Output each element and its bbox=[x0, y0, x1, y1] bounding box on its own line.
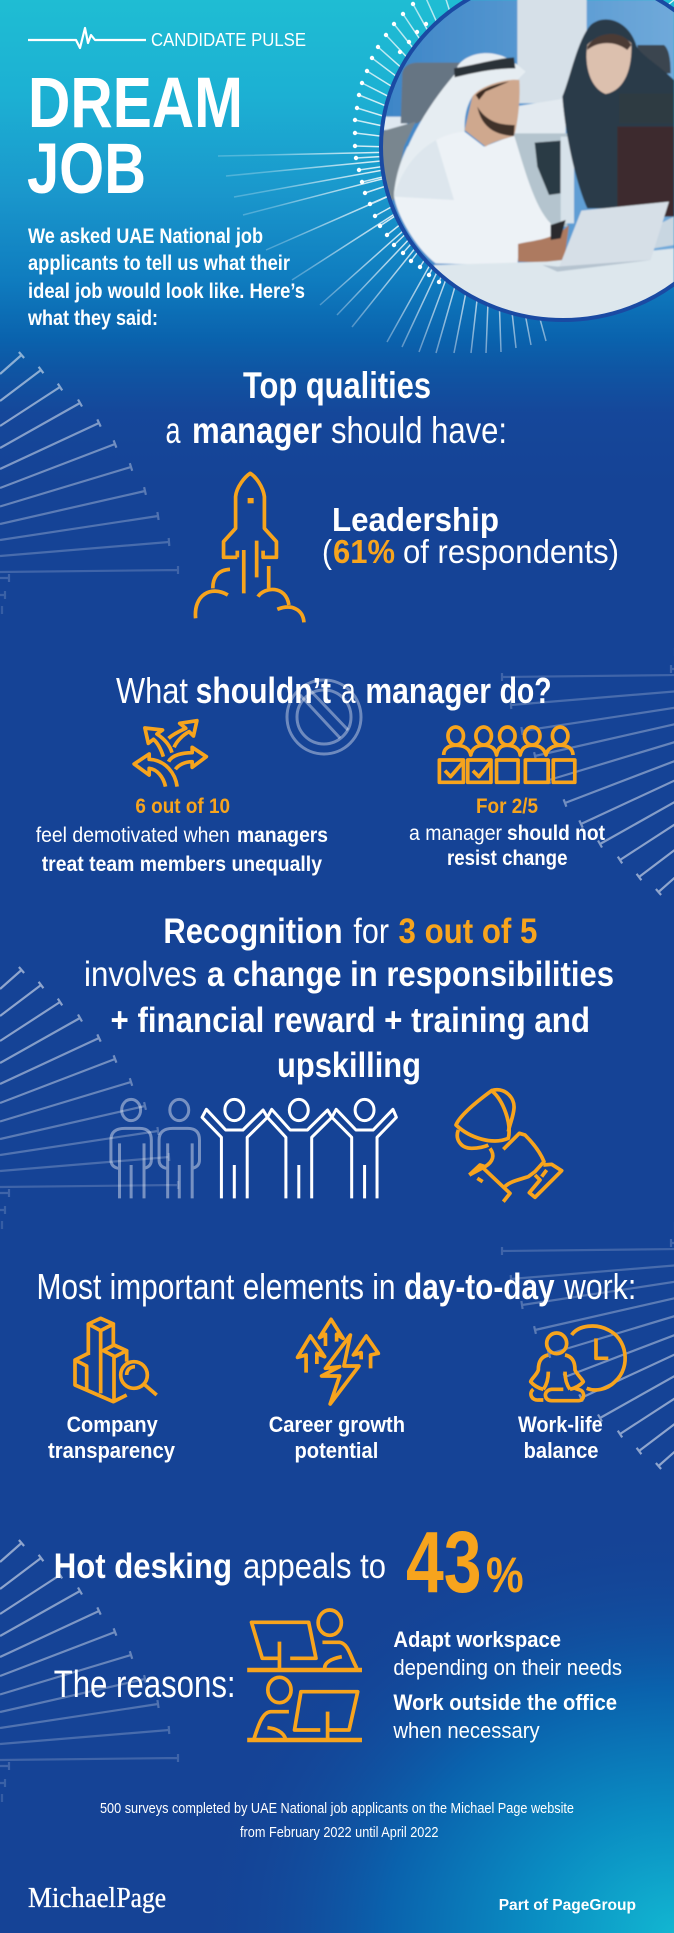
label: Work-life bbox=[518, 1412, 603, 1437]
stat: leadership 61% bbox=[322, 502, 619, 571]
stat: leadership 61%: Leadership bbox=[332, 502, 499, 539]
stat: leadership 61%: 61% bbox=[333, 534, 395, 571]
intro text: applicants to tell us what their bbox=[28, 252, 290, 275]
heading: top qualities bbox=[166, 365, 507, 451]
item: company transparency bbox=[48, 1318, 175, 1463]
heading: what shouldn't a manager do: do? bbox=[500, 670, 552, 711]
stat: 6 out of 10: 6 out of 10 bbox=[135, 794, 230, 818]
label: balance bbox=[524, 1438, 598, 1463]
heading: hot desking 43% bbox=[54, 1514, 524, 1611]
photo: man and woman working at a laptop bbox=[374, 0, 674, 330]
logo: michael page: Page bbox=[116, 1883, 166, 1914]
footnote: 500 surveys completed by UAE National job applicants on the Michael Page website bbox=[100, 1800, 574, 1817]
label bbox=[48, 1412, 175, 1463]
decorative rays: left and right bursts bbox=[0, 352, 674, 1802]
faded people bbox=[111, 1099, 199, 1198]
footnote bbox=[100, 1800, 574, 1841]
heading: most important elements: work: bbox=[563, 1266, 636, 1307]
logo: michael page bbox=[28, 1883, 166, 1914]
title: JOB bbox=[27, 130, 146, 209]
heading: hot desking 43%: 43 bbox=[406, 1514, 482, 1611]
heading: top qualities: a bbox=[166, 410, 181, 451]
heading: what shouldn't a manager do: What bbox=[116, 670, 188, 711]
decorative rays around the photo bbox=[218, 0, 674, 353]
intro text: We asked UAE National job bbox=[28, 225, 263, 248]
heading: recognition: upskilling bbox=[277, 1045, 421, 1085]
brand label: candidate pulse: CANDIDATE PULSE bbox=[151, 30, 306, 50]
heading: top qualities: should have: bbox=[331, 410, 507, 451]
heading: what shouldn't a manager do: manager bbox=[365, 670, 491, 711]
heading: recognition: a change in responsibilities bbox=[207, 954, 614, 994]
intro text: ideal job would look like. Here’s bbox=[28, 280, 305, 303]
reasons text bbox=[393, 1627, 622, 1743]
intro text bbox=[27, 225, 305, 330]
section: day-to-day work bbox=[36, 1266, 636, 1463]
stat: 6 out of 10 bbox=[36, 794, 328, 876]
heading: top qualities: manager bbox=[192, 410, 322, 451]
icon: tilted trophy bbox=[456, 1090, 562, 1202]
label: Career growth bbox=[269, 1412, 405, 1437]
heading: hot desking 43%: appeals to bbox=[243, 1547, 386, 1586]
stat: 6 out of 10: managers bbox=[237, 823, 328, 847]
heading: most important elements: day-to-day bbox=[404, 1266, 555, 1307]
heading: what shouldn't a manager do: shouldn’t bbox=[196, 670, 331, 711]
highlighted people bbox=[202, 1099, 396, 1198]
icon: prohibited watermark bbox=[287, 680, 361, 754]
background corner glow bbox=[0, 1350, 674, 1933]
icon: diverging arrows bbox=[134, 721, 206, 787]
title bbox=[27, 64, 243, 209]
label: Company bbox=[67, 1412, 158, 1437]
label: the reasons: The reasons: bbox=[54, 1664, 236, 1706]
item: work-life balance bbox=[518, 1326, 625, 1463]
heading: recognition: + financial reward + training and bbox=[110, 1000, 590, 1040]
reasons text: when necessary bbox=[393, 1718, 540, 1743]
heading: most important elements: Most important elements in bbox=[36, 1266, 396, 1307]
icon: buildings and magnifier bbox=[75, 1318, 157, 1402]
heading: recognition: Recognition bbox=[163, 911, 343, 951]
heading: top qualities: Top qualities bbox=[243, 365, 431, 406]
logo: michael page: Michael bbox=[28, 1883, 116, 1914]
icon: arrows and lightning bbox=[298, 1319, 378, 1404]
reasons text: depending on their needs bbox=[393, 1655, 622, 1680]
reasons text: Work outside the office bbox=[393, 1690, 617, 1715]
tagline: part of pagegroup: Part of PageGroup bbox=[499, 1897, 636, 1914]
label bbox=[518, 1412, 603, 1463]
section: recognition bbox=[84, 911, 614, 1202]
stat: for 2/5: For 2/5 bbox=[476, 794, 538, 818]
intro text: what they said: bbox=[27, 307, 158, 330]
stat: for 2/5: should not bbox=[507, 821, 605, 845]
section: what a manager shouldn't do bbox=[36, 670, 605, 876]
label: potential bbox=[294, 1438, 378, 1463]
stat: for 2/5 bbox=[409, 794, 605, 870]
stat: for 2/5: a manager bbox=[409, 821, 502, 845]
reasons text: Adapt workspace bbox=[393, 1627, 561, 1652]
footnote: from February 2022 until April 2022 bbox=[240, 1824, 438, 1841]
icon: rocket bbox=[195, 473, 304, 622]
icon: people and checkboxes bbox=[439, 727, 575, 782]
heading: recognition: 3 out of 5 bbox=[398, 911, 537, 951]
stat: 6 out of 10: treat team members unequally bbox=[42, 852, 322, 876]
stat: for 2/5: resist change bbox=[447, 846, 568, 870]
title: DREAM bbox=[28, 64, 243, 143]
heading: recognition: involves bbox=[84, 954, 197, 994]
heading: hot desking 43%: % bbox=[486, 1547, 524, 1603]
pulse line bbox=[28, 28, 146, 48]
icon: two people at desks bbox=[247, 1610, 362, 1740]
icon: team of people bbox=[111, 1099, 396, 1198]
section: hot desking bbox=[54, 1514, 622, 1743]
heading: what shouldn't a manager do bbox=[116, 670, 552, 711]
section: top manager qualities bbox=[166, 365, 619, 622]
item: career growth potential bbox=[269, 1319, 405, 1463]
heading: what shouldn't a manager do: a bbox=[341, 670, 356, 711]
label bbox=[269, 1412, 405, 1463]
heading: hot desking 43%: Hot desking bbox=[54, 1547, 232, 1586]
heading: recognition bbox=[84, 911, 614, 1085]
stat: 6 out of 10: feel demotivated when bbox=[36, 823, 230, 847]
icon: meditating person and clock bbox=[531, 1326, 625, 1401]
stat: leadership 61%: of respondents) bbox=[403, 534, 619, 571]
stat: leadership 61%: ( bbox=[322, 534, 332, 571]
label: transparency bbox=[48, 1438, 175, 1463]
heading: recognition: for bbox=[353, 911, 389, 951]
